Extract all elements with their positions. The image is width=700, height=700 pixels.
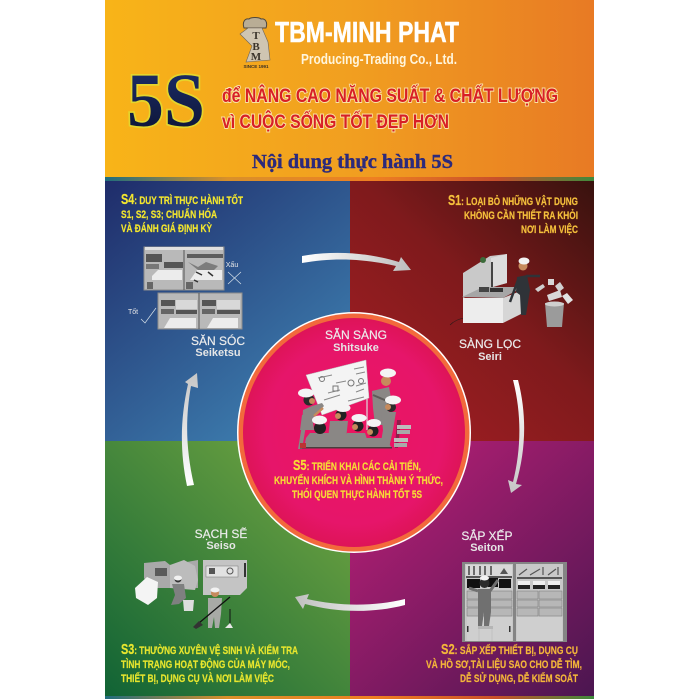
S1 description: NƠI LÀM VIỆC — [521, 223, 578, 236]
logo: TBM crest: B — [252, 41, 260, 53]
panel: S4 Seiketsu — [105, 181, 350, 441]
good label with tick: Tốt — [128, 307, 138, 316]
S3 description: S3: THƯỜNG XUYÊN VỆ SINH VÀ KIỂM TRA — [121, 642, 298, 658]
S2 description: DỄ SỬ DỤNG, DỄ KIỂM SOÁT — [460, 672, 578, 685]
S5 description — [274, 458, 443, 501]
bottom colour strip — [105, 696, 594, 699]
bad label with cross: Xấu — [226, 260, 238, 269]
header band — [105, 0, 594, 178]
label: San sang: SẴN SÀNG — [325, 327, 387, 342]
label: San soc — [191, 333, 245, 359]
icon: messy and tidy offices — [144, 247, 242, 329]
section heading: Nội dung thực hành 5S — [252, 151, 453, 173]
panel: S1 Seiri — [350, 181, 594, 441]
S3 description: TÌNH TRẠNG HOẠT ĐỘNG CỦA MÁY MÓC, — [121, 658, 290, 671]
company subtitle: Producing-Trading Co., Ltd. — [301, 52, 457, 68]
slogan line 1: để NÂNG CAO NĂNG SUẤT & CHẤT LƯỢNG — [222, 83, 558, 107]
label: San sang: Shitsuke — [333, 342, 379, 354]
label: San soc: Seiketsu — [195, 347, 241, 359]
logo: TBM crest — [240, 18, 270, 69]
icon: workers cleaning machines — [135, 560, 247, 629]
arrow: S2 to S3 — [295, 594, 405, 611]
label: Sang loc — [459, 336, 521, 363]
S4 description — [121, 192, 243, 235]
S4 description: S1, S2, S3; CHUẨN HÓA — [121, 208, 217, 221]
label: Sach se — [195, 527, 247, 552]
S5 description: KHUYẾN KHÍCH VÀ HÌNH THÀNH Ý THỨC, — [274, 474, 443, 487]
S1 description — [448, 193, 578, 236]
good label with tick — [128, 307, 156, 323]
S2 description: VÀ HỒ SƠ,TÀI LIỆU SAO CHO DỄ TÌM, — [426, 658, 582, 671]
panel: S3 Seiso — [105, 441, 350, 696]
bad label with cross — [226, 260, 241, 284]
S1 description: S1: LOẠI BỎ NHỮNG VẬT DỤNG — [448, 193, 578, 209]
panel: S2 Seiton — [350, 441, 594, 696]
label: Sap xep: Seiton — [470, 542, 504, 554]
company name: TBM-MINH PHAT — [275, 17, 459, 49]
logo: TBM crest: SINCE 1991 — [243, 64, 269, 69]
label: Sang loc: Seiri — [478, 351, 502, 363]
arrow: S3 to S4 — [182, 373, 198, 486]
S3 description — [121, 642, 298, 685]
arrow: S1 to S2 — [508, 380, 524, 493]
label: Sach se: Seiso — [206, 540, 236, 552]
panel: S5 Shitsuke circle — [237, 312, 471, 553]
S1 description: KHÔNG CẦN THIẾT RA KHỎI — [464, 209, 578, 222]
big 5S: 5S — [127, 59, 205, 143]
icon: team at whiteboard — [298, 360, 411, 449]
icon: worker arranging cabinets — [462, 562, 567, 642]
logo: TBM crest: T — [252, 30, 260, 42]
slogan line 2: vì CUỘC SỐNG TỐT ĐẸP HƠN — [222, 109, 449, 133]
S5 description: THÓI QUEN THỰC HÀNH TỐT 5S — [292, 487, 422, 501]
top colour strip — [105, 177, 594, 181]
label: Sap xep: SẮP XẾP — [461, 528, 513, 543]
S5 description: S5: TRIỂN KHAI CÁC CẢI TIẾN, — [293, 458, 421, 474]
arrow: S4 to S1 — [302, 253, 411, 271]
label: Sach se: SẠCH SẼ — [195, 527, 247, 541]
label: Sap xep — [461, 528, 513, 554]
label: Sang loc: SÀNG LỌC — [459, 336, 521, 351]
label: San sang — [325, 327, 387, 354]
icon: worker discarding items — [450, 254, 573, 327]
S4 description: VÀ ĐÁNH GIÁ ĐỊNH KỲ — [121, 222, 212, 235]
S4 description: S4: DUY TRÌ THỰC HÀNH TỐT — [121, 192, 243, 208]
S3 description: THIẾT BỊ, DỤNG CỤ VÀ NƠI LÀM VIỆC — [121, 672, 274, 685]
label: San soc: SĂN SÓC — [191, 333, 245, 348]
S2 description — [426, 642, 582, 685]
S2 description: S2: SẮP XẾP THIẾT BỊ, DỤNG CỤ — [441, 642, 578, 658]
logo: TBM crest: M — [251, 51, 262, 63]
